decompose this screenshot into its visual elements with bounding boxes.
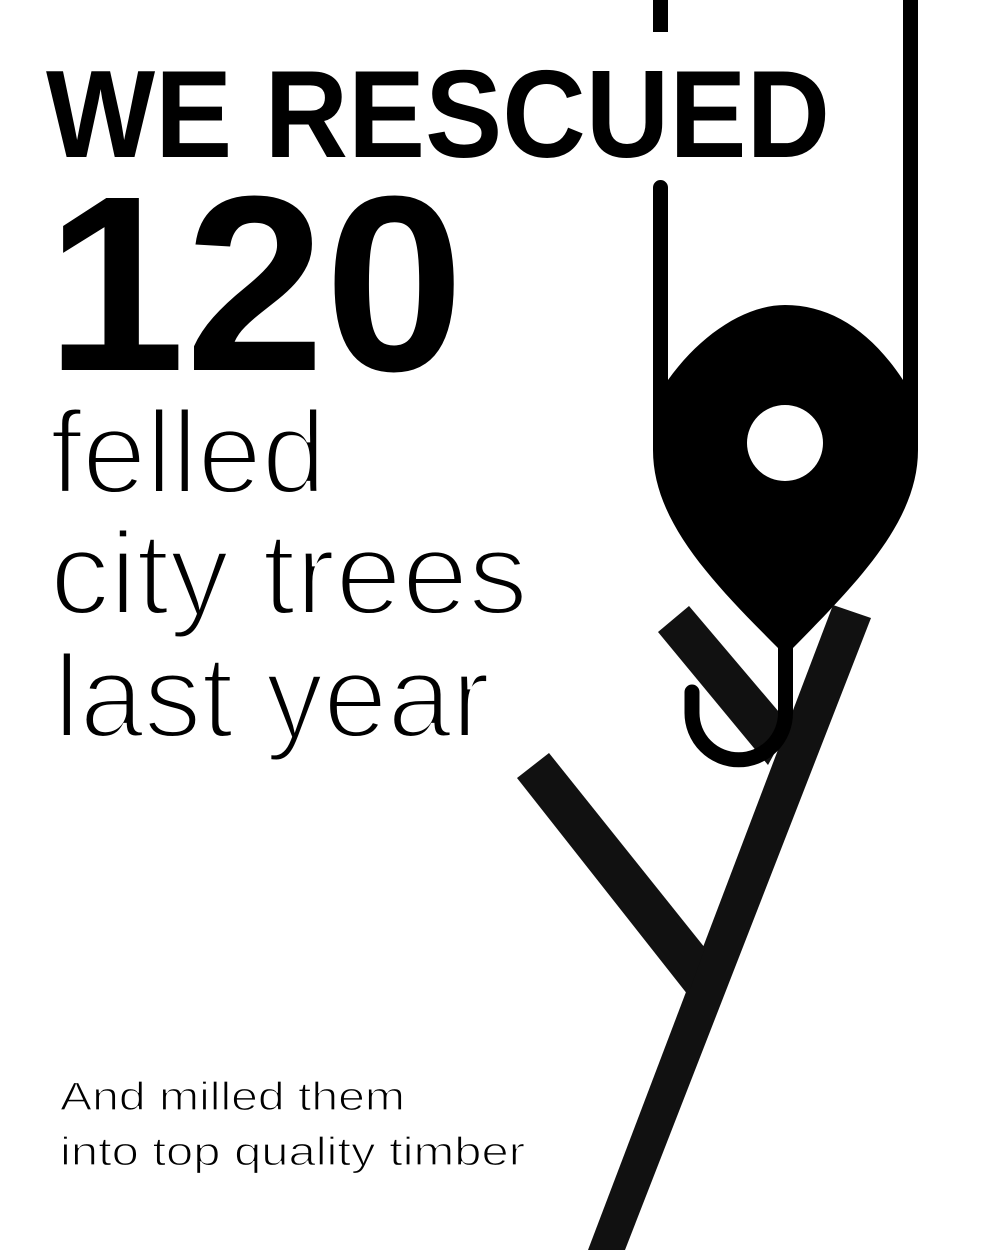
subtitle text block: last year <box>54 631 490 763</box>
subtitle text block: city trees <box>50 508 528 640</box>
subtitle text block <box>50 387 528 763</box>
pulley hole <box>747 405 823 481</box>
footnote text <box>60 1075 525 1174</box>
pulley block <box>653 305 918 660</box>
footnote text: into top quality timber <box>60 1130 525 1174</box>
rope top stub <box>653 0 668 32</box>
icon: crane hook on rope forming letter y <box>517 0 918 1250</box>
hook <box>692 650 786 760</box>
footnote text: And milled them <box>60 1075 405 1119</box>
letter y strokes <box>588 605 871 1250</box>
rope left <box>653 180 668 400</box>
big number 120: 120 <box>46 144 464 423</box>
rope right <box>903 0 918 400</box>
title: we rescued: WE RESCUED <box>46 46 830 184</box>
subtitle text block: felled <box>50 387 326 519</box>
